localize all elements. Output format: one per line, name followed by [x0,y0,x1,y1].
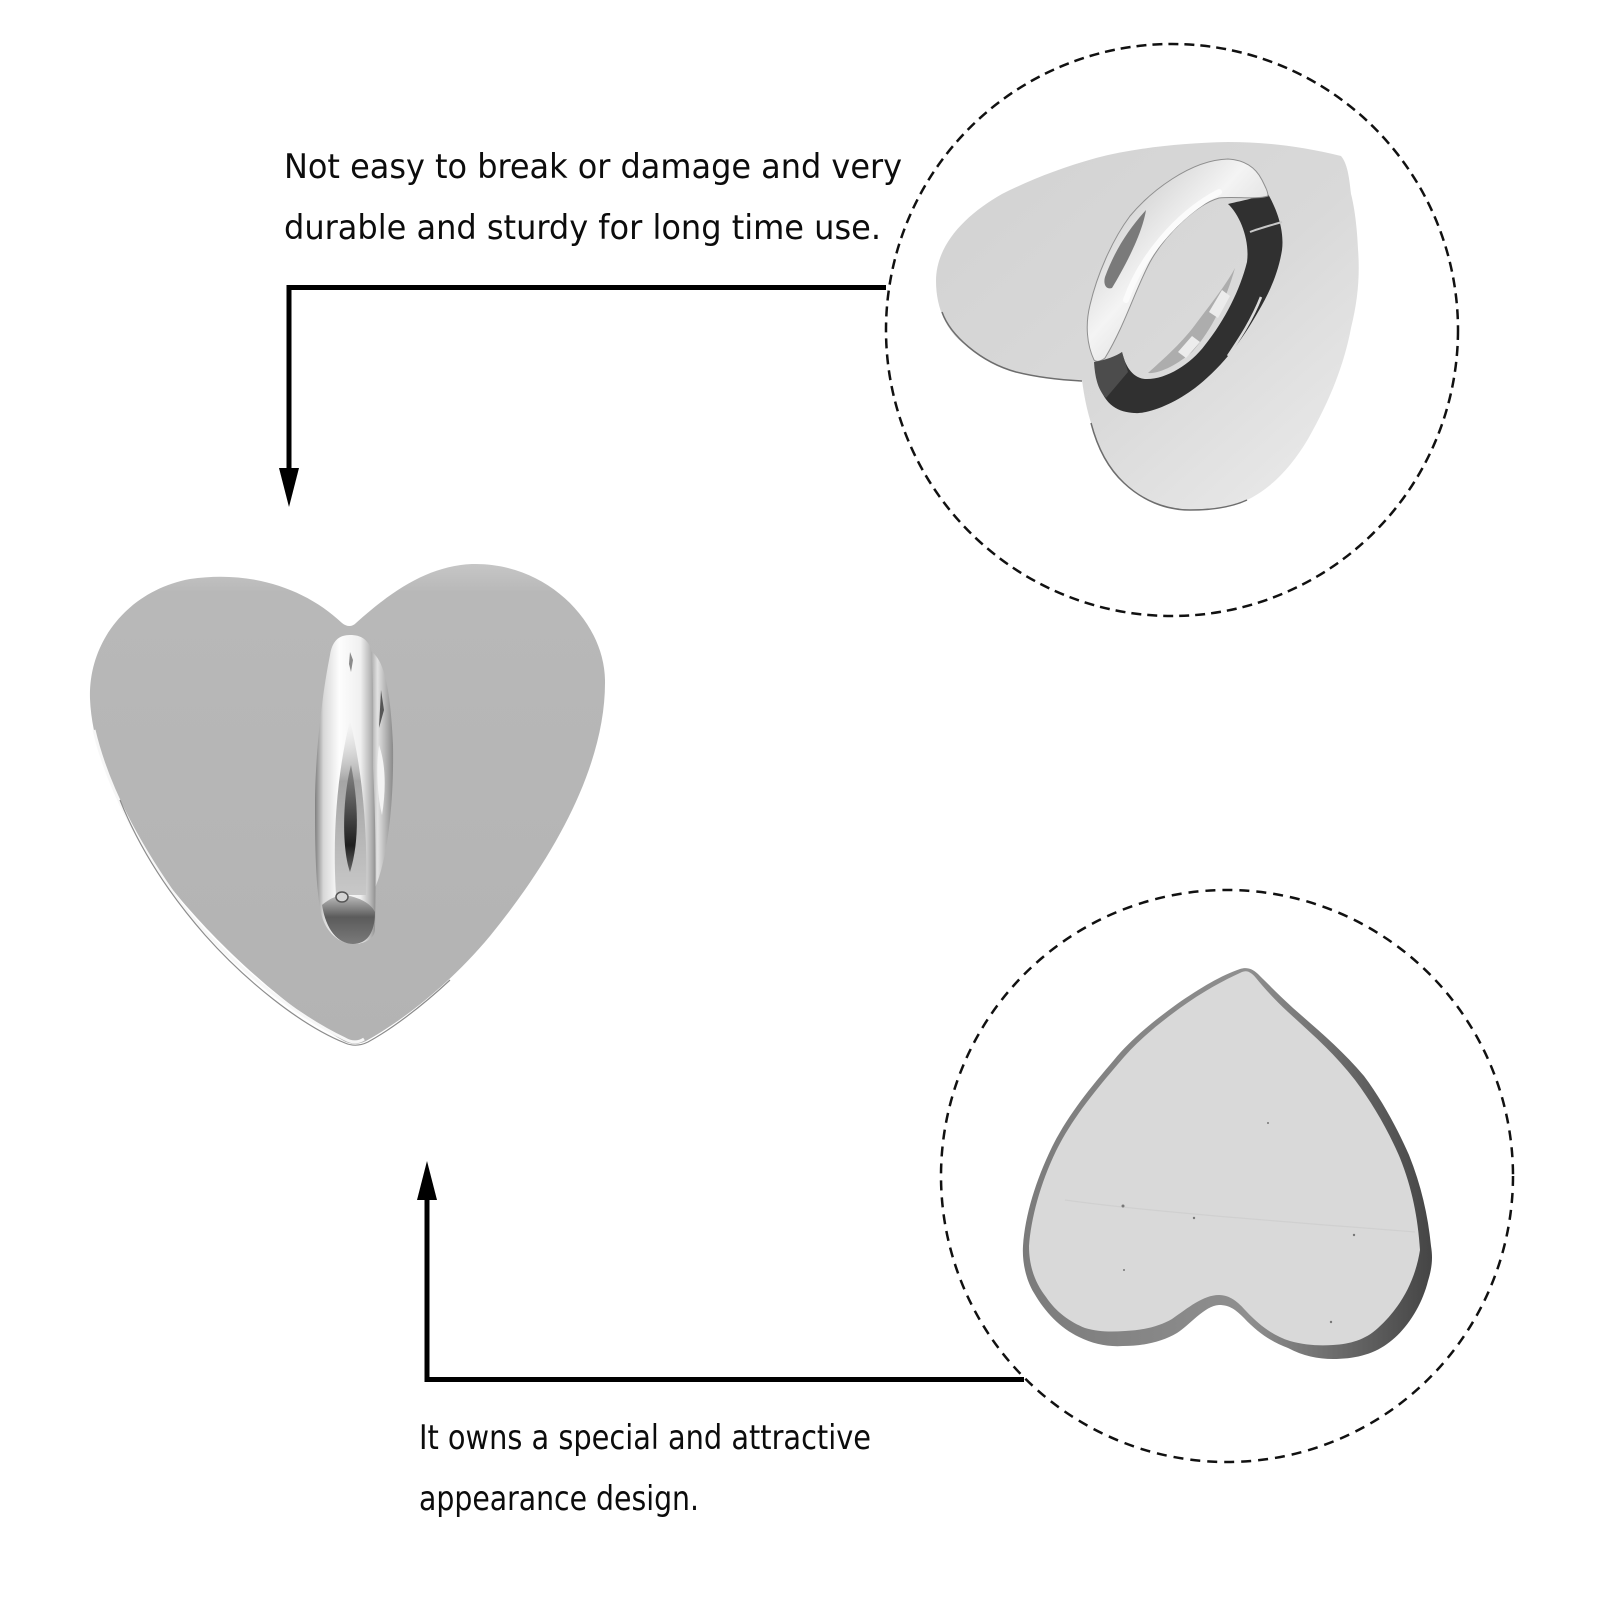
panel: bottom right detail circle [941,890,1513,1462]
ring [1087,159,1282,413]
callout text: appearance: It owns a special and attractive [419,1418,871,1458]
callout text: durability [284,147,902,248]
heart inner face [1029,971,1420,1345]
callout text: appearance: appearance design. [419,1479,699,1519]
plate dark edge lines [942,312,1247,510]
ring dark lower band [1096,194,1282,413]
arrow: bottom circle to main heart [417,1161,1024,1380]
ring inner metal glints [1178,290,1230,358]
ring dark reflection [344,765,357,872]
panel: main heart product view [90,564,605,1045]
dashed circle [941,890,1513,1462]
heart plate front [90,564,605,1044]
heart rim [1023,968,1432,1359]
callout text: appearance [419,1418,871,1519]
dashed circle [886,44,1458,616]
panel: top right detail circle [886,44,1458,616]
ring left base shadow [1094,352,1128,398]
ring base shadow [322,895,375,944]
heart faint scratch and specks [1065,1122,1415,1323]
ring upper grey streak [1104,210,1146,288]
callout text: durability: durable and sturdy for long time use. [284,208,881,248]
heart plate outer edge line [120,800,450,1045]
arrow: top circle to main heart [279,288,886,507]
back ring glints [379,690,384,728]
back of hanging ring [362,650,393,890]
tilted heart plate [936,142,1359,510]
heart plate lower edge highlight [94,730,364,1042]
front of hanging ring [315,635,376,944]
ring upper light band [1087,159,1268,361]
ring upper white strip [1126,192,1219,300]
ring central grey band [335,720,366,895]
ring base rivet [336,892,348,902]
callout text: durability: Not easy to break or damage and very [284,147,902,187]
ring small top glint [349,652,353,672]
ring right joint glint [1250,222,1282,232]
ring lower edge glint [1228,297,1261,356]
ring inner metal band [1148,268,1235,373]
